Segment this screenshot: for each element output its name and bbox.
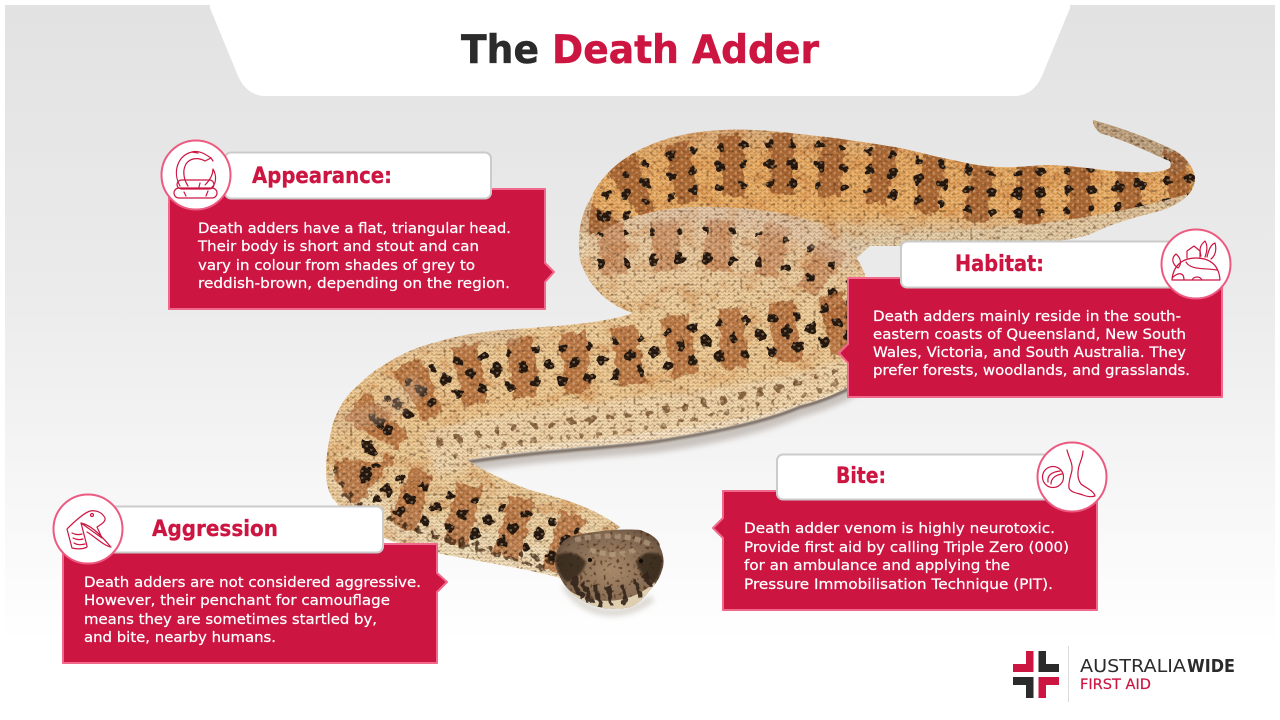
- heading: Habitat:: [955, 252, 1044, 277]
- panel: aggression: [54, 494, 447, 663]
- heading: Appearance:: [252, 164, 392, 189]
- logo wordmark: AUSTRALIA: [1080, 656, 1187, 677]
- body text: eastern coasts of Queensland, New South: [873, 327, 1186, 343]
- text panel: [169, 189, 554, 309]
- heading: Bite:: [836, 464, 886, 489]
- icon: coiled snake: [162, 140, 230, 210]
- icon: habitat hill: [1162, 230, 1230, 298]
- snake illustration: [320, 115, 1210, 615]
- panel: bite: [713, 442, 1106, 610]
- body text: Death adder venom is highly neurotoxic.: [744, 521, 1055, 537]
- body text: However, their penchant for camouflage: [84, 593, 390, 609]
- snake head: [554, 530, 664, 609]
- body text: Pressure Immobilisation Technique (PIT).: [744, 577, 1053, 593]
- body text: Death adders have a flat, triangular head.: [198, 221, 511, 237]
- body text: Their body is short and stout and can: [197, 239, 479, 255]
- snake mid body, lower body and neck: [320, 200, 880, 590]
- body text: Death adders are not considered aggressive.: [84, 575, 421, 591]
- body text: reddish-brown, depending on the region.: [198, 276, 510, 292]
- body text: Death adders mainly reside in the south-: [873, 309, 1181, 325]
- heading bar: [777, 454, 1067, 500]
- body text: [197, 221, 511, 292]
- body text: Wales, Victoria, and South Australia. They: [873, 345, 1186, 361]
- heading: Aggression: [152, 517, 278, 542]
- text panel: [839, 278, 1222, 397]
- text panel: [713, 491, 1097, 610]
- body text: vary in colour from shades of grey to: [198, 258, 475, 274]
- title: Death Adder: [552, 28, 820, 73]
- body text: prefer forests, woodlands, and grasslands.: [873, 363, 1190, 379]
- body text: [744, 521, 1069, 593]
- icon: striking snake head: [54, 494, 122, 564]
- logo: Australia Wide First Aid: [1013, 646, 1235, 702]
- logo cross mark: [1013, 651, 1059, 698]
- heading bar: [225, 152, 491, 198]
- body text: and bite, nearby humans.: [84, 630, 276, 646]
- body text: Provide first aid by calling Triple Zero (000): [744, 540, 1069, 556]
- logo wordmark: WIDE: [1187, 656, 1235, 677]
- panel: appearance: [162, 140, 554, 309]
- body text: means they are sometimes startled by,: [84, 612, 377, 628]
- body text: [873, 309, 1190, 379]
- body text: for an ambulance and applying the: [744, 558, 1010, 574]
- icon: bitten foot: [1038, 442, 1106, 512]
- body text: [84, 575, 421, 646]
- title: The: [461, 28, 539, 73]
- text panel: [63, 544, 447, 663]
- heading bar: [901, 242, 1191, 288]
- heading bar: [100, 506, 383, 552]
- snake rear body and tail: [570, 115, 1210, 318]
- panel: habitat: [839, 230, 1230, 397]
- title banner: [210, 0, 1070, 96]
- snake ground shadow: [467, 388, 858, 613]
- logo tagline: FIRST AID: [1080, 677, 1151, 693]
